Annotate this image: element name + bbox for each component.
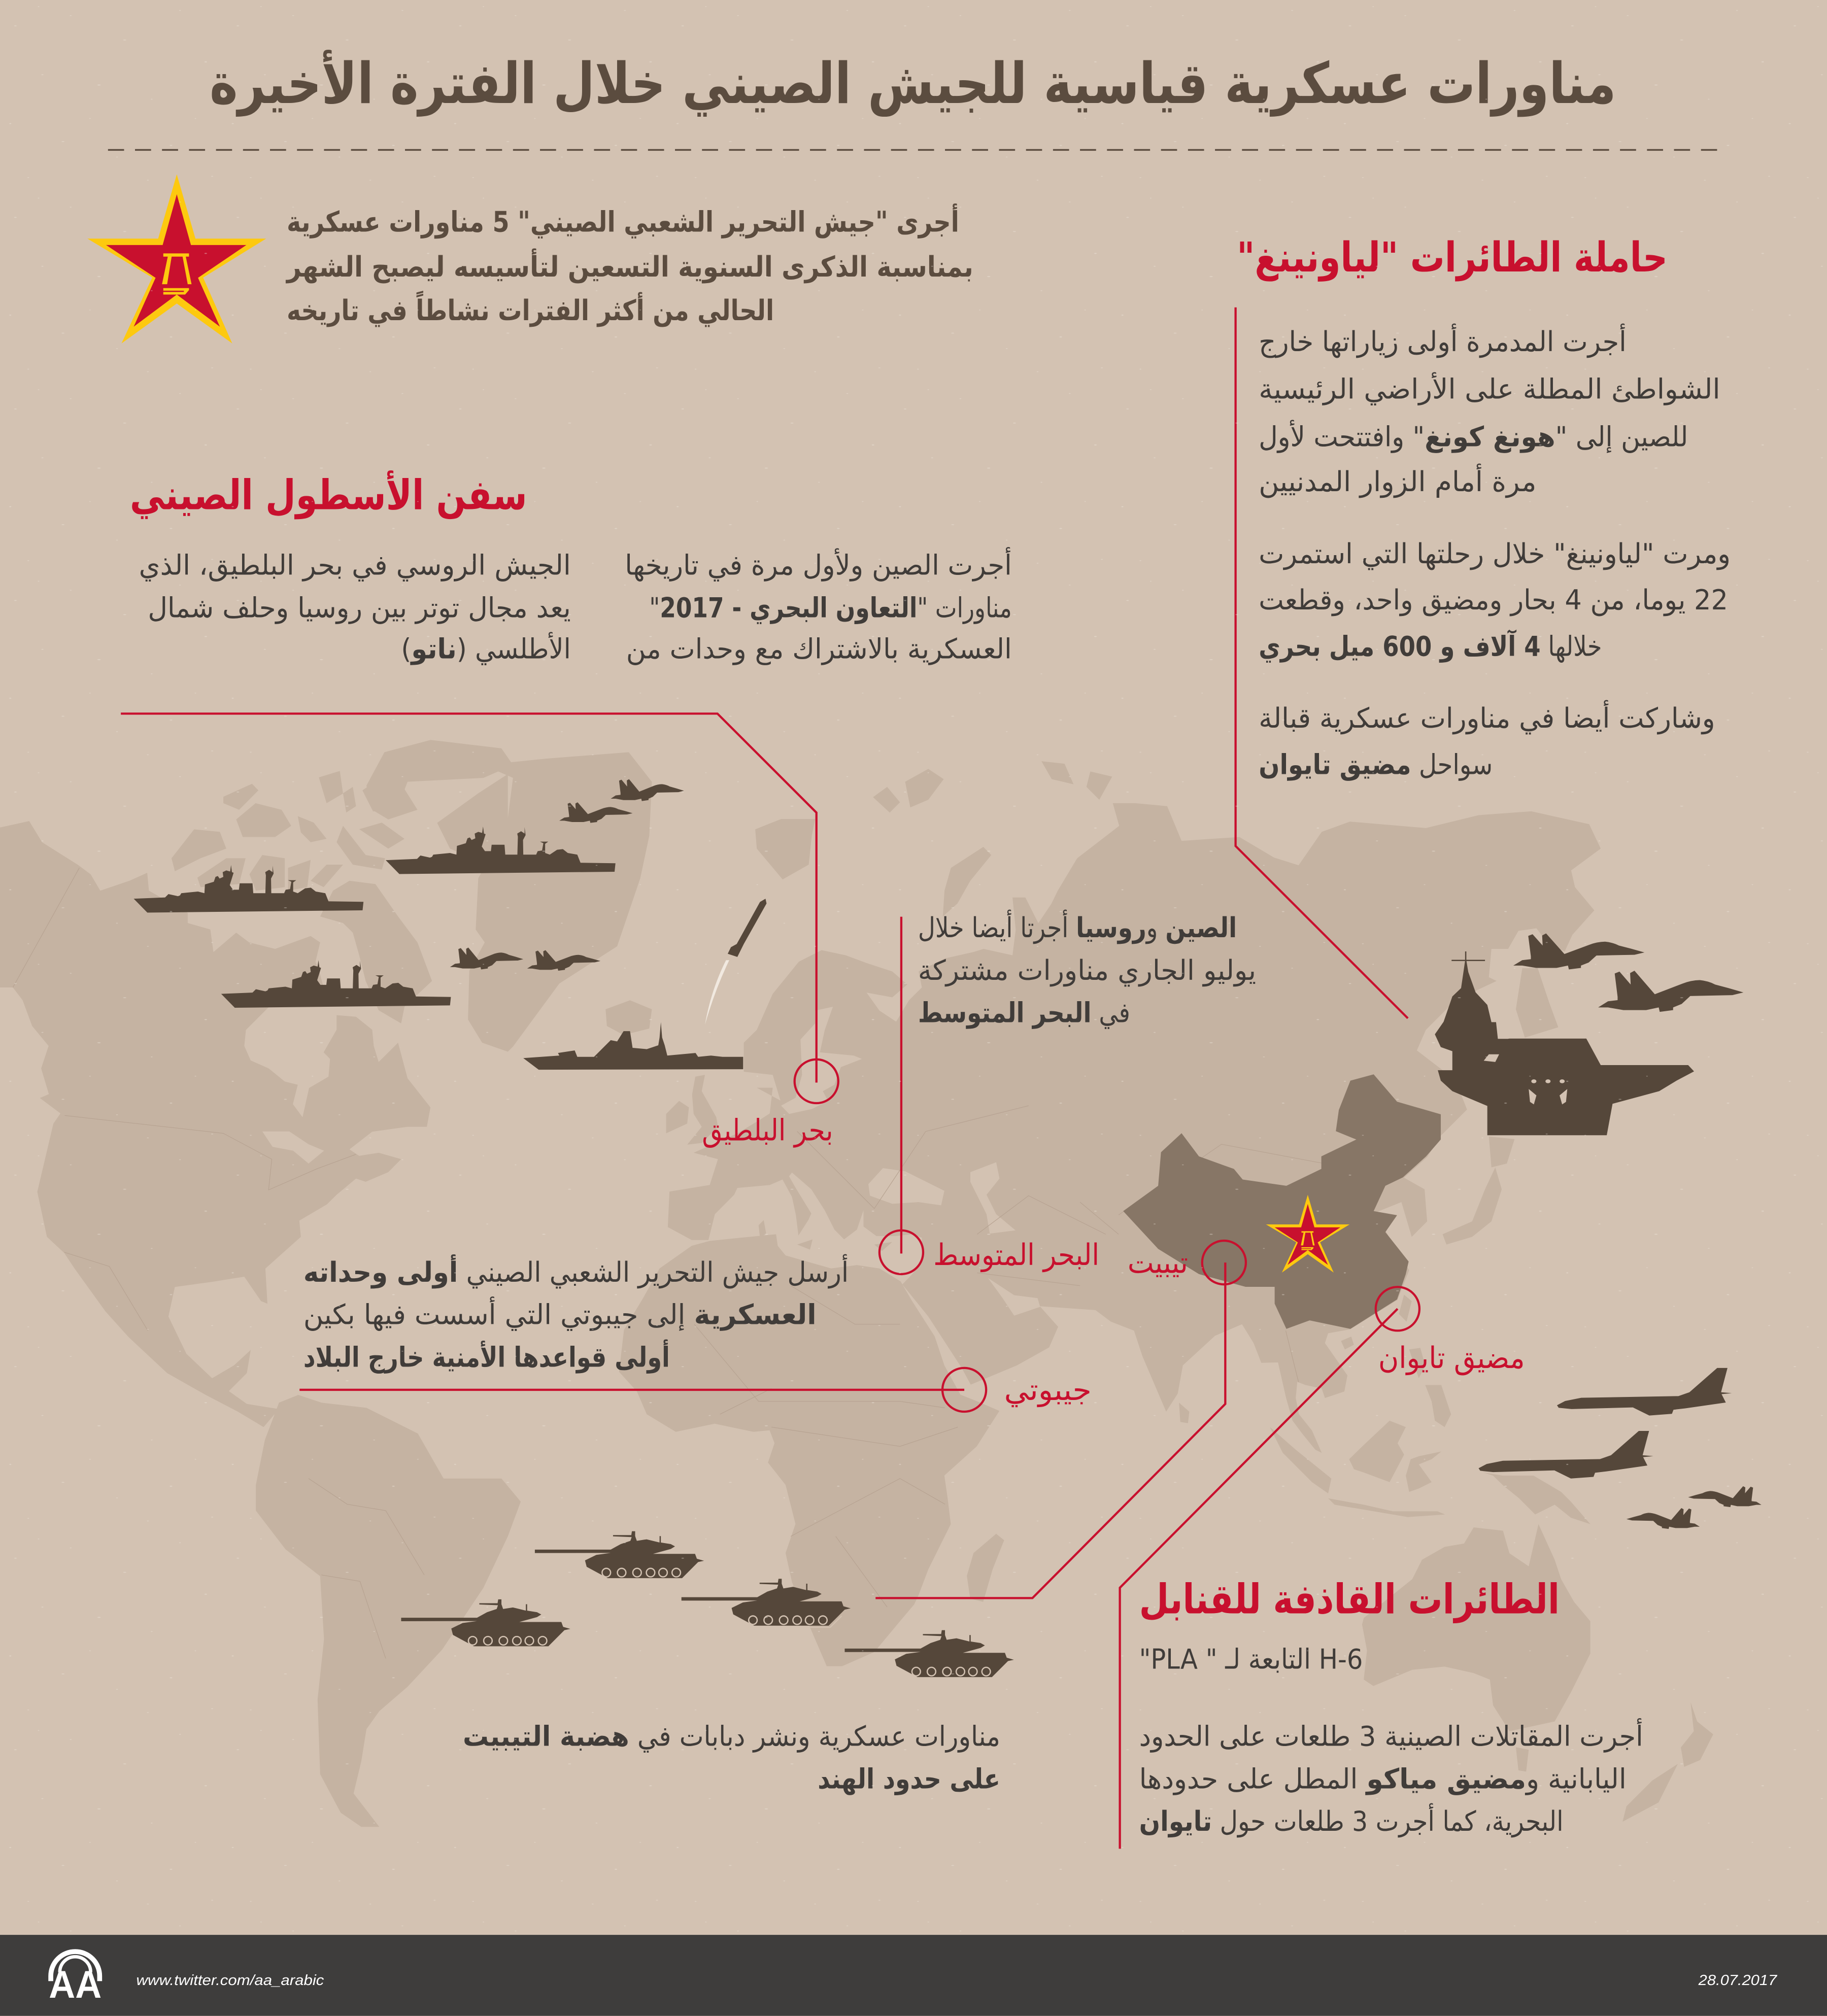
land: iceland bbox=[605, 1000, 652, 1035]
label: tibet: تيبيت bbox=[1128, 1245, 1188, 1280]
text block: joint exercises bbox=[625, 547, 1012, 665]
leader: tibet bbox=[875, 1241, 1246, 1598]
intro text: الحالي من أكثر الفترات نشاطاً في تاريخه bbox=[287, 291, 774, 327]
land: novaya zemlya bbox=[943, 847, 991, 916]
text block: tibet tanks: مناورات عسكرية ونشر دبابات في هضبة التيبيت bbox=[463, 1720, 1000, 1753]
land: hainan bbox=[1341, 1337, 1354, 1349]
text block: liaoning visit: للصين إلى "هونغ كونغ" وافتتحت لأول bbox=[1259, 420, 1688, 453]
text block: sorties bbox=[1139, 1718, 1643, 1837]
footer url: www.twitter.com/aa_arabic bbox=[137, 1972, 324, 1989]
leader: taiwan strait bbox=[1120, 1287, 1419, 1849]
icon: carrier jets bbox=[1513, 934, 1743, 1012]
intro text bbox=[285, 203, 973, 327]
jet right bbox=[1688, 1486, 1762, 1507]
heading: fleet: سفن الأسطول الصيني bbox=[130, 470, 527, 520]
text block: djibouti base bbox=[303, 1254, 849, 1374]
china highlighted bbox=[1123, 1074, 1441, 1329]
text block: joint exercises: العسكرية بالاشتراك مع وحدات من bbox=[626, 632, 1012, 665]
land: africa bbox=[619, 1234, 999, 1666]
panel: chinese fleet bbox=[130, 470, 1012, 665]
text block: liaoning visit: أجرت المدمرة أولى زياراتها خارج bbox=[1259, 323, 1627, 358]
land: severnaya zemlya bbox=[1041, 761, 1112, 800]
country borders bbox=[13, 868, 1324, 1658]
icon: escort jets bbox=[1627, 1486, 1762, 1529]
land: sakhalin bbox=[1516, 968, 1559, 1038]
label: taiwan strait: مضيق تايوان bbox=[1378, 1341, 1525, 1376]
text block: russian fleet: يعد مجال توتر بين روسيا وحلف شمال bbox=[148, 591, 571, 624]
heading: liaoning: حاملة الطائرات "لياونينغ" bbox=[1237, 234, 1668, 282]
land: sulawesi bbox=[1406, 1452, 1441, 1492]
land: sumatra bbox=[1270, 1427, 1331, 1493]
text block: russian fleet: الجيش الروسي في بحر البلطيق، الذي bbox=[139, 549, 571, 582]
text block: djibouti base: أولى قواعدها الأمنية خارج البلاد bbox=[303, 1339, 670, 1374]
land: tasmania bbox=[1516, 1747, 1529, 1771]
icon: fleet ships bbox=[133, 827, 743, 1070]
text block: sorties: البحرية، كما أجرت 3 طلعات حول تايوان bbox=[1139, 1803, 1564, 1837]
land: britain bbox=[687, 1075, 718, 1145]
bomber 1 bbox=[1557, 1368, 1732, 1416]
jet 2 bbox=[1598, 971, 1743, 1012]
text block: liaoning visit: مرة أمام الزوار المدنيين bbox=[1259, 463, 1536, 498]
panel: liaoning carrier bbox=[1237, 234, 1731, 780]
leader: carrier bbox=[1236, 307, 1408, 1018]
ship 1 bbox=[133, 865, 363, 913]
intro text: أجرى "جيش التحرير الشعبي الصيني" 5 مناورات عسكرية bbox=[287, 203, 959, 238]
icon: red star emblem bbox=[87, 175, 266, 344]
ship 4 bbox=[523, 1022, 743, 1070]
heading: bombers: الطائرات القاذفة للقنابل bbox=[1139, 1576, 1560, 1624]
text block: liaoning voyage bbox=[1259, 537, 1731, 663]
icon: bombers bbox=[1478, 1368, 1732, 1479]
text block: liaoning drills bbox=[1259, 700, 1715, 780]
text block: sorties: أجرت المقاتلات الصينية 3 طلعات على الحدود bbox=[1139, 1718, 1643, 1753]
land: new guinea bbox=[1483, 1473, 1591, 1524]
jet 3 bbox=[450, 947, 523, 969]
intro text: بمناسبة الذكرى السنوية التسعين لتأسيسه ليصبح الشهر bbox=[285, 248, 973, 284]
jet 2 bbox=[559, 802, 632, 823]
land: taiwan bbox=[1399, 1294, 1412, 1322]
text block: liaoning voyage: ومرت "لياونينغ" خلال رحلتها التي استمرت bbox=[1259, 537, 1731, 570]
land: greenland bbox=[468, 752, 652, 1052]
icon: tanks bbox=[401, 1531, 1014, 1679]
icon: star on china bbox=[1266, 1195, 1349, 1273]
land: ireland bbox=[666, 1101, 689, 1134]
title: مناورات عسكرية قياسية للجيش الصيني خلال الفترة الأخيرة bbox=[210, 49, 1616, 117]
footer date: 28.07.2017 bbox=[1698, 1972, 1778, 1989]
world map bbox=[0, 740, 1713, 1827]
tank 2 bbox=[682, 1579, 851, 1627]
text block: russian fleet bbox=[139, 549, 571, 665]
land: south america bbox=[256, 1395, 521, 1827]
icon: aircraft carrier bbox=[1435, 951, 1694, 1135]
seas bbox=[262, 1007, 1040, 1316]
title divider bbox=[108, 149, 1723, 150]
land: japan bbox=[1443, 1137, 1514, 1245]
subheading: h-6: H-6 التابعة لـ " PLA" bbox=[1139, 1643, 1363, 1676]
text block: sorties: اليابانية ومضيق مياكو المطل على حدودها bbox=[1139, 1762, 1627, 1795]
tank 4 bbox=[844, 1630, 1014, 1679]
text block: liaoning drills: سواحل مضيق تايوان bbox=[1259, 748, 1493, 780]
text block: china and russia bbox=[918, 909, 1256, 1029]
jet 1 bbox=[611, 779, 684, 801]
panel: h-6 bombers bbox=[1139, 1576, 1643, 1837]
label: mediterranean sea: البحر المتوسط bbox=[933, 1238, 1099, 1273]
text block: liaoning voyage: 22 يوما، من 4 بحار ومضيق واحد، وقطعت bbox=[1259, 584, 1728, 617]
text block: russian fleet: الأطلسي (ناتو) bbox=[401, 632, 571, 665]
jet left bbox=[1627, 1508, 1700, 1529]
ship 3 bbox=[221, 960, 451, 1008]
text block: liaoning visit: الشواطئ المطلة على الأراضي الرئيسية bbox=[1259, 372, 1720, 405]
text block: liaoning visit bbox=[1259, 323, 1720, 498]
tank 1 bbox=[535, 1531, 704, 1580]
jet 4 bbox=[527, 950, 600, 971]
land: svalbard bbox=[755, 819, 815, 879]
land: borneo bbox=[1349, 1421, 1406, 1482]
text block: china and russia: في البحر المتوسط bbox=[918, 996, 1130, 1029]
text block: djibouti base: العسكرية إلى جيبوتي التي أسست فيها بكين bbox=[303, 1296, 817, 1331]
footer bbox=[0, 1935, 1827, 2016]
tank 3 bbox=[401, 1599, 570, 1648]
jet 1 bbox=[1513, 934, 1644, 969]
bomber 2 bbox=[1478, 1431, 1653, 1479]
text block: liaoning drills: وشاركت أيضا في مناورات عسكرية قبالة bbox=[1259, 700, 1715, 734]
land: eurasia bbox=[668, 803, 1601, 1453]
land: australia bbox=[1362, 1524, 1591, 1731]
land: franz josef land bbox=[873, 769, 944, 812]
text block: joint exercises: أجرت الصين ولأول مرة في تاريخها bbox=[625, 547, 1012, 582]
logo: anadolu agency: AA bbox=[49, 1963, 101, 2006]
leader: mediterranean bbox=[879, 917, 923, 1274]
text block: china and russia: يوليو الجاري مناورات مشتركة bbox=[918, 954, 1256, 986]
icon: missile bbox=[705, 899, 766, 1024]
land: sri lanka bbox=[1179, 1403, 1189, 1423]
land: philippines bbox=[1409, 1348, 1451, 1427]
leader: baltic bbox=[121, 713, 838, 1103]
land: madagascar bbox=[967, 1534, 1004, 1602]
text block: djibouti base: أرسل جيش التحرير الشعبي الصيني أولى وحداته bbox=[303, 1254, 849, 1289]
land: north america bbox=[0, 821, 430, 1427]
icon: fleet jets bbox=[450, 779, 684, 971]
text block: china and russia: الصين وروسيا أجرتا أيضا خلال bbox=[918, 909, 1237, 944]
leader: djibouti bbox=[299, 1368, 986, 1412]
land: new zealand bbox=[1622, 1702, 1713, 1822]
ship 2 bbox=[386, 827, 616, 874]
text block: tibet tanks bbox=[463, 1720, 1000, 1795]
label: djibouti: جيبوتي bbox=[1004, 1373, 1092, 1408]
land: arctic islands bbox=[172, 740, 513, 1023]
mediterranean islands bbox=[759, 1220, 892, 1251]
land: java and sunda bbox=[1328, 1498, 1445, 1517]
label: baltic sea: بحر البلطيق bbox=[702, 1113, 833, 1148]
text block: tibet tanks: على حدود الهند bbox=[818, 1762, 1000, 1795]
text block: joint exercises: مناورات "التعاون البحري - 2017" bbox=[649, 591, 1012, 624]
text block: liaoning voyage: خلالها 4 آلاف و 600 ميل بحري bbox=[1259, 629, 1602, 663]
